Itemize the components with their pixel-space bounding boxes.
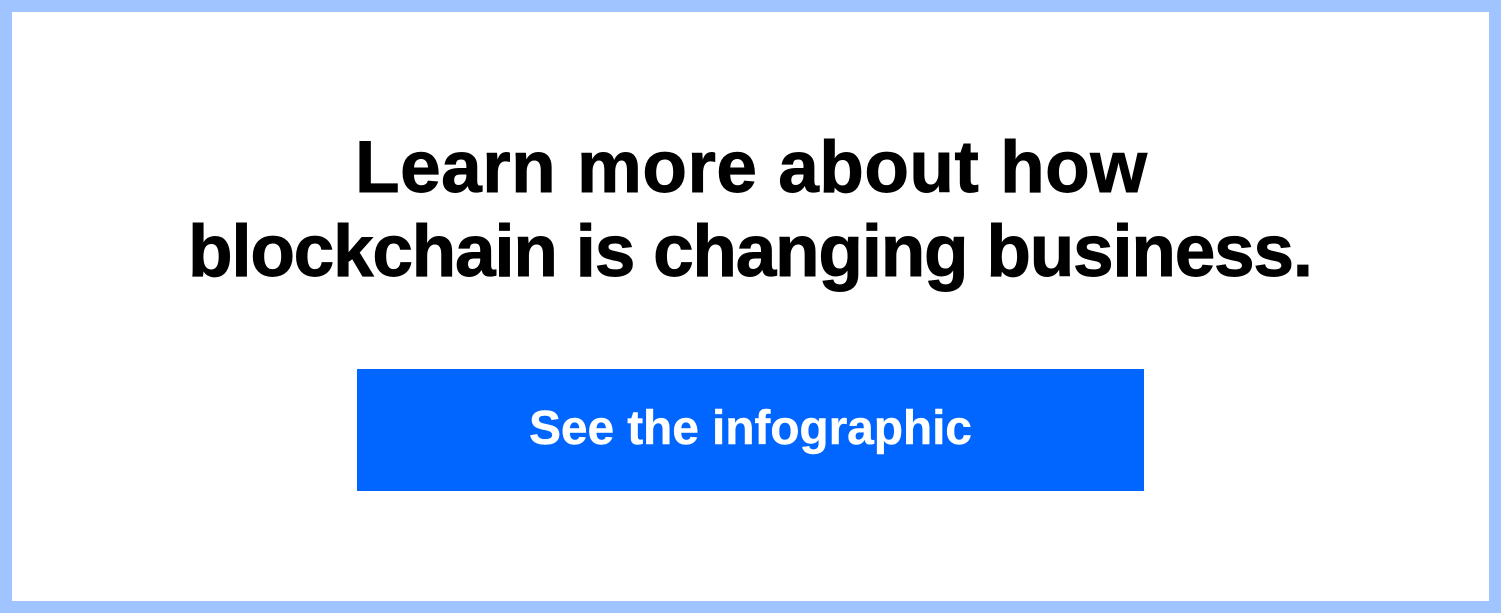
heading: Learn more about how [355,127,1147,208]
button: See the infographic [357,369,1144,491]
button: See the infographic: See the infographic [529,402,972,455]
heading [188,127,1313,292]
heading: blockchain is changing business. [188,211,1313,292]
